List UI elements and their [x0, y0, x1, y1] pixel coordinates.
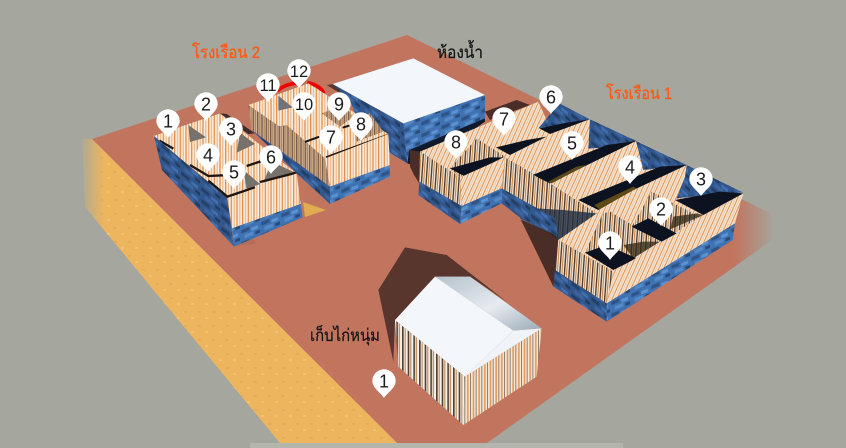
- marker 8: [444, 130, 468, 159]
- marker 11: 11: [259, 77, 277, 95]
- markers: house 1: [444, 85, 713, 260]
- marker: young chicken house: 1: [379, 372, 389, 392]
- markers: house 2: [156, 59, 373, 189]
- marker 6: 6: [546, 88, 556, 108]
- marker 7: [319, 125, 343, 154]
- house 1 ground shadows: [410, 100, 558, 287]
- marker 3: [689, 167, 713, 196]
- house 1 room shading: [623, 213, 703, 258]
- ground plot: [92, 35, 772, 443]
- wall: front right: [607, 193, 743, 303]
- label: house 1: โรงเรือน 1: [606, 83, 672, 103]
- house 1 floor glow: [548, 165, 637, 209]
- block A grey floors: [188, 125, 295, 189]
- block B partition shadows: [305, 124, 388, 157]
- marker: young chicken house: [372, 369, 396, 398]
- block A left wall: [154, 136, 234, 247]
- marker 5: 5: [567, 134, 577, 154]
- marker 3: 3: [226, 120, 236, 140]
- base: front right: [607, 223, 735, 322]
- marker 5: [222, 160, 246, 189]
- house 1 mid wall: [502, 157, 597, 240]
- block B right base: [330, 165, 390, 204]
- base: room 8 right: [460, 188, 502, 224]
- chicken house gable roof: [465, 328, 542, 377]
- marker 11: [256, 73, 280, 102]
- block B inner dark panels: [277, 105, 383, 170]
- block B red arcs: [277, 83, 324, 93]
- marker 7: 7: [499, 110, 509, 130]
- building: house 2 block A: [153, 113, 303, 247]
- house 1 partition walls: [450, 138, 700, 270]
- marker 4: [618, 155, 642, 184]
- chicken house main roof: [395, 277, 513, 377]
- building: house 1: [410, 100, 743, 322]
- marker 1: 1: [163, 112, 173, 132]
- house 1 mid base: [502, 188, 558, 236]
- block B interior: [248, 83, 388, 158]
- marker 8: 8: [451, 132, 461, 152]
- sand strip: [82, 139, 397, 443]
- block A partition shadows: [159, 141, 297, 197]
- bathroom roof: [333, 58, 485, 123]
- marker 10: [292, 92, 316, 121]
- house 1 interior: [420, 102, 743, 272]
- wall: room 8 left: [419, 152, 462, 206]
- marker 3: 3: [696, 170, 706, 190]
- marker 5: 5: [229, 162, 239, 182]
- bathroom left wall: [333, 84, 407, 163]
- house 1 rear wall sections: [538, 103, 743, 198]
- block B left wall: [248, 105, 330, 187]
- marker 9: 9: [334, 94, 344, 114]
- block B grey floor: [278, 96, 293, 111]
- label: house 2: โรงเรือน 2: [192, 42, 260, 62]
- house 1 dark rooms: [450, 119, 743, 270]
- building: house 2 block B: [248, 83, 390, 204]
- marker 4: 4: [203, 146, 213, 166]
- marker 1: 1: [605, 234, 615, 254]
- marker 2: [194, 92, 218, 121]
- marker 5: [560, 131, 584, 160]
- marker 2: [649, 197, 673, 226]
- marker 7: 7: [326, 128, 336, 148]
- block A right wall: [227, 173, 301, 228]
- block A interior: [153, 113, 297, 198]
- marker 12: 12: [290, 63, 308, 81]
- marker 8: [349, 112, 373, 141]
- marker 12: [287, 59, 311, 88]
- house 1 mid wall shadow: [520, 208, 597, 240]
- chicken house left wall: [395, 320, 465, 425]
- chicken house right wall: [463, 328, 542, 425]
- label: bathroom: ห้องน้ำ: [437, 40, 483, 62]
- bathroom right wall: [403, 95, 485, 163]
- chicken house shadow: [378, 247, 507, 362]
- chicken house shaded roof: [435, 277, 542, 331]
- block B right wall: [325, 134, 390, 187]
- block A floor shadow: [160, 163, 257, 247]
- block A rear edge: [220, 113, 255, 134]
- wall: room 8 right: [460, 157, 505, 206]
- marker 3: [219, 117, 243, 146]
- bottom strip: [250, 443, 623, 448]
- marker 8: 8: [356, 114, 366, 134]
- marker 6: 6: [266, 148, 276, 168]
- marker 2: 2: [656, 200, 666, 220]
- label: young chicken house: เก็บไก่หนุ่ม: [310, 324, 380, 346]
- marker 6: [539, 85, 563, 114]
- marker 1: [156, 109, 180, 138]
- marker 4: 4: [625, 158, 635, 178]
- marker 1: [598, 231, 622, 260]
- building: bathroom: [327, 58, 485, 167]
- building: young chicken house: [378, 247, 542, 425]
- base: front left: [553, 270, 607, 322]
- bathroom shadow: [327, 83, 353, 97]
- block B left base: [252, 130, 330, 204]
- marker 7: [492, 107, 516, 136]
- marker 10: 10: [295, 96, 313, 114]
- bathroom floor shadow: [407, 118, 485, 167]
- block A base: [232, 204, 303, 247]
- base: room 8 left: [418, 182, 462, 224]
- marker 4: [196, 143, 220, 172]
- wall: front left: [555, 240, 613, 303]
- marker 2: 2: [201, 94, 211, 114]
- marker 6: [259, 145, 283, 174]
- marker 9: [327, 92, 351, 121]
- sand patch between buildings: [303, 202, 326, 217]
